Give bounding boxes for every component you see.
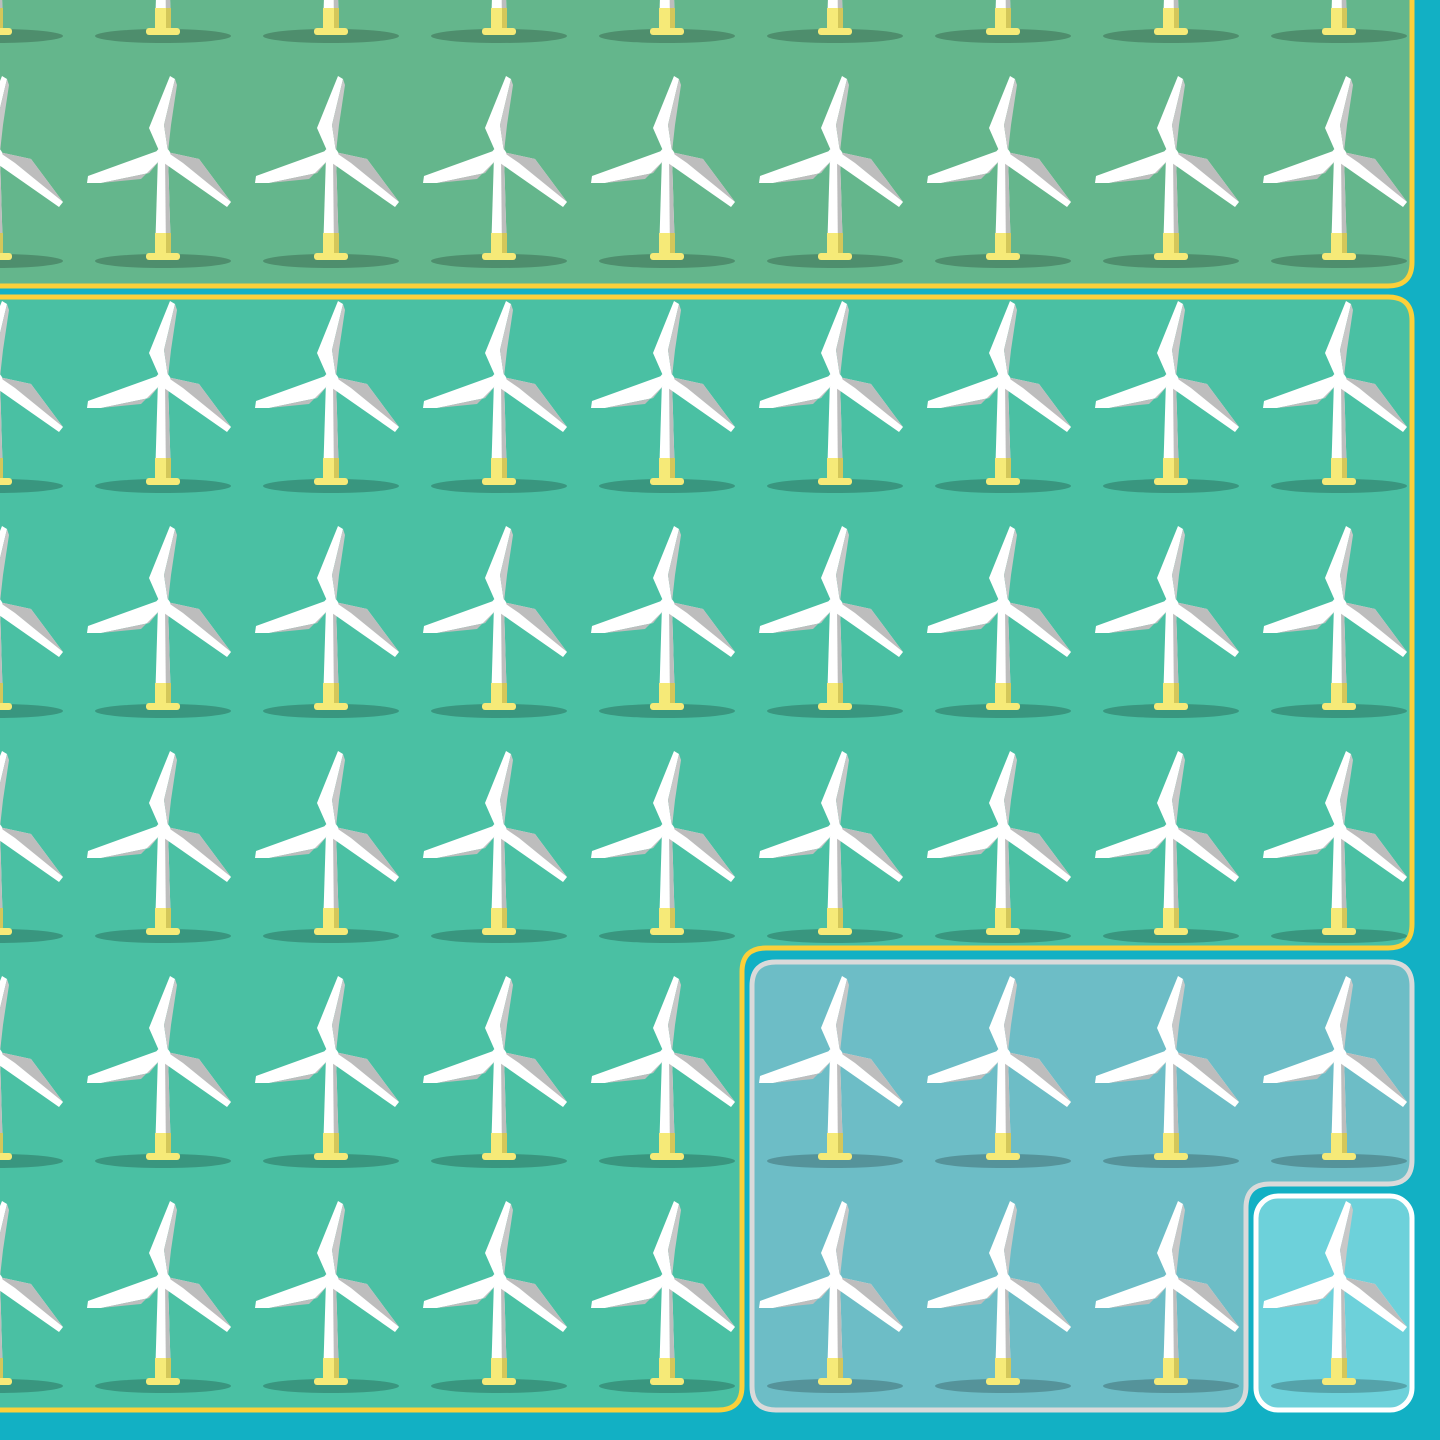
turbines: row 4 [0,526,1407,718]
panel: main teal-green L-shape [0,297,1412,1410]
panel: gray-bordered blue L-shape [752,962,1412,1410]
turbines: row 1 [0,0,1407,43]
turbines: row 3 [0,301,1407,493]
turbines: row 2 [0,76,1407,268]
turbines: row 6 [0,976,1407,1168]
panel: top green [0,0,1412,286]
turbines: row 5 [0,751,1407,943]
turbines: row 7 [0,1201,1407,1393]
panel: single turbine box [1256,1196,1412,1410]
